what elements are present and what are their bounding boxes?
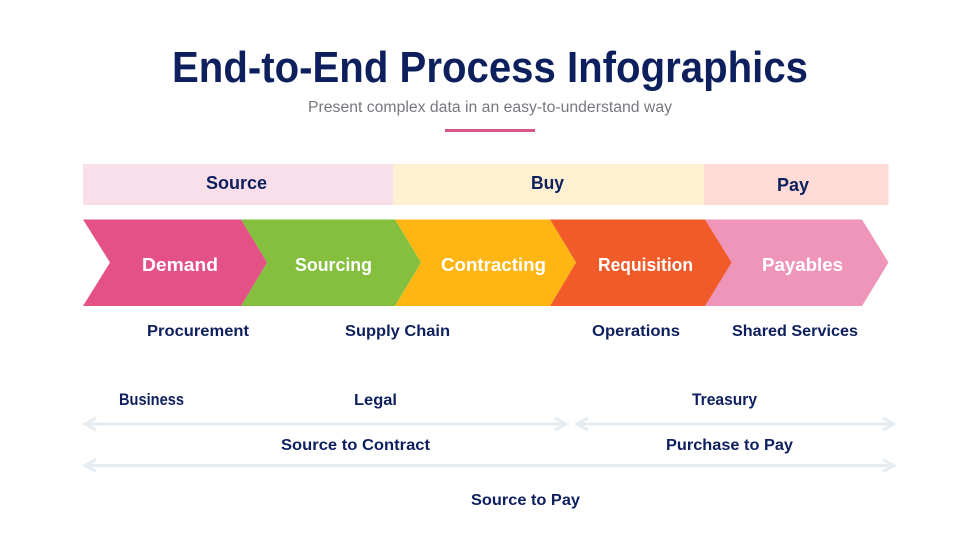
subtitle: Present complex data in an easy-to-understand way [308,99,672,116]
band: Pay [704,164,888,205]
band: Pay: Pay [777,174,810,195]
arrow: Source to Contract span [85,418,566,430]
band: Buy [393,164,704,205]
chevron: Contracting: Contracting [441,254,546,275]
label: Shared Services: Shared Services [732,323,858,340]
chevron: Demand: Demand [142,254,218,275]
chevron: Contracting [395,220,576,306]
band: Source: Source [206,172,267,193]
chevron: Payables [705,220,888,306]
chevron: Sourcing [241,220,421,306]
label: Business: Business [119,391,184,409]
label: Supply Chain: Supply Chain [345,323,450,340]
label: Source to Contract: Source to Contract [281,437,431,454]
title underline accent [445,129,535,132]
label: Treasury: Treasury [692,391,758,409]
arrow: Purchase to Pay span [577,418,894,430]
arrow: Source to Pay span [85,460,894,472]
band: Buy: Buy [531,172,565,193]
chevron: Sourcing: Sourcing [295,254,372,275]
label: Purchase to Pay: Purchase to Pay [666,437,793,454]
label: Source to Pay: Source to Pay [471,492,580,509]
title: End-to-End Process Infographics [172,43,808,92]
chevron: Payables: Payables [762,254,843,275]
label: Operations: Operations [592,323,680,340]
chevron: Demand [83,220,267,306]
band: Source [83,164,393,205]
process chevrons [83,220,888,306]
chevron: Requisition: Requisition [598,254,693,275]
chevron: Requisition [550,220,732,306]
label: Legal: Legal [354,392,397,409]
label: Procurement: Procurement [147,323,250,340]
phase band: source, buy, pay [83,164,888,205]
